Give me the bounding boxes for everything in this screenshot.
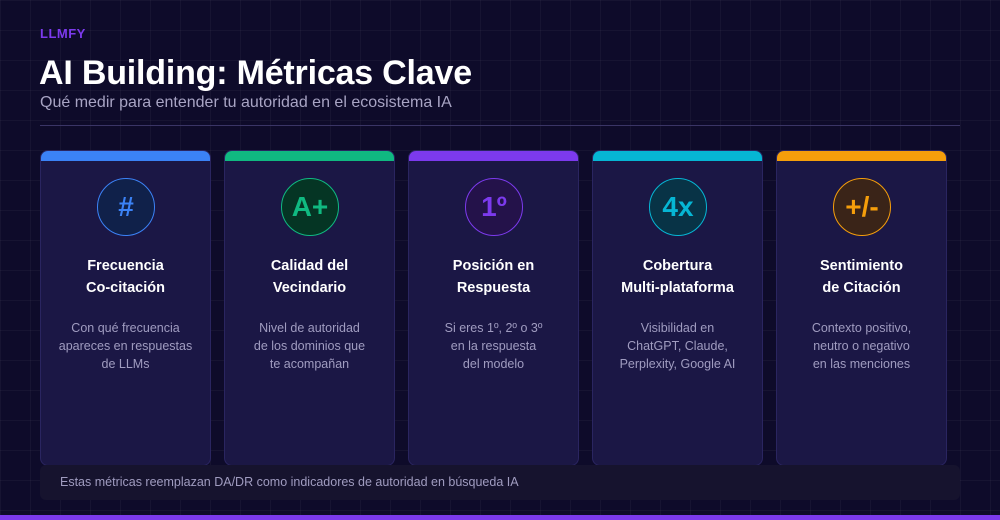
card: sentimiento: [776, 150, 947, 466]
card: calidad: [224, 150, 395, 466]
footer note: [40, 465, 960, 500]
card: posicion: en la respuesta: [451, 339, 536, 353]
icon: 4x: [649, 178, 707, 236]
card: posicion: [408, 150, 579, 466]
icon: +/-: [833, 178, 891, 236]
icon: hash: #: [118, 191, 134, 222]
card: frecuencia: de LLMs: [102, 357, 149, 371]
card: cobertura: [592, 150, 763, 466]
card: frecuencia: Frecuencia: [87, 258, 164, 274]
brand: LLMFY: [40, 26, 86, 41]
card: posicion: Si eres 1º, 2º o 3º: [445, 321, 542, 335]
icon: A+: A+: [292, 191, 328, 222]
card: posicion: del modelo: [463, 357, 524, 371]
icon: 1º: [465, 178, 523, 236]
card: calidad: te acompañan: [270, 357, 349, 371]
icon: 4x: 4x: [662, 191, 694, 222]
icon: hash: [97, 178, 155, 236]
card: cobertura: Perplexity, Google AI: [620, 357, 735, 371]
card: calidad: Vecindario: [273, 280, 346, 296]
card: cobertura: Multi-plataforma: [621, 280, 734, 296]
card: posicion: Respuesta: [457, 280, 530, 296]
card: cobertura: ChatGPT, Claude,: [627, 339, 728, 353]
icon: +/-: +/-: [845, 191, 879, 222]
icon: 1º: 1º: [481, 191, 507, 222]
card: cobertura: Visibilidad en: [641, 321, 714, 335]
card: posicion: Posición en: [453, 258, 534, 274]
card: sentimiento: en las menciones: [813, 357, 910, 371]
card: sentimiento: Contexto positivo,: [812, 321, 911, 335]
card: sentimiento: neutro o negativo: [813, 339, 910, 353]
card: sentimiento: de Citación: [822, 280, 901, 296]
card: cobertura: Cobertura: [643, 258, 712, 274]
card: frecuencia: [40, 150, 211, 466]
footer note: Estas métricas reemplazan DA/DR como indicadores de autoridad en búsqueda IA: [60, 475, 519, 489]
title: AI Building: Métricas Clave: [39, 54, 472, 92]
card: frecuencia: Con qué frecuencia: [71, 321, 180, 335]
subtitle: Qué medir para entender tu autoridad en el ecosistema IA: [40, 94, 452, 111]
card: sentimiento: Sentimiento: [820, 258, 903, 274]
card: calidad: Nivel de autoridad: [259, 321, 360, 335]
card: frecuencia: Co-citación: [86, 280, 165, 296]
card: calidad: Calidad del: [271, 258, 348, 274]
card: calidad: de los dominios que: [254, 339, 365, 353]
card: frecuencia: apareces en respuestas: [59, 339, 192, 353]
icon: A+: [281, 178, 339, 236]
